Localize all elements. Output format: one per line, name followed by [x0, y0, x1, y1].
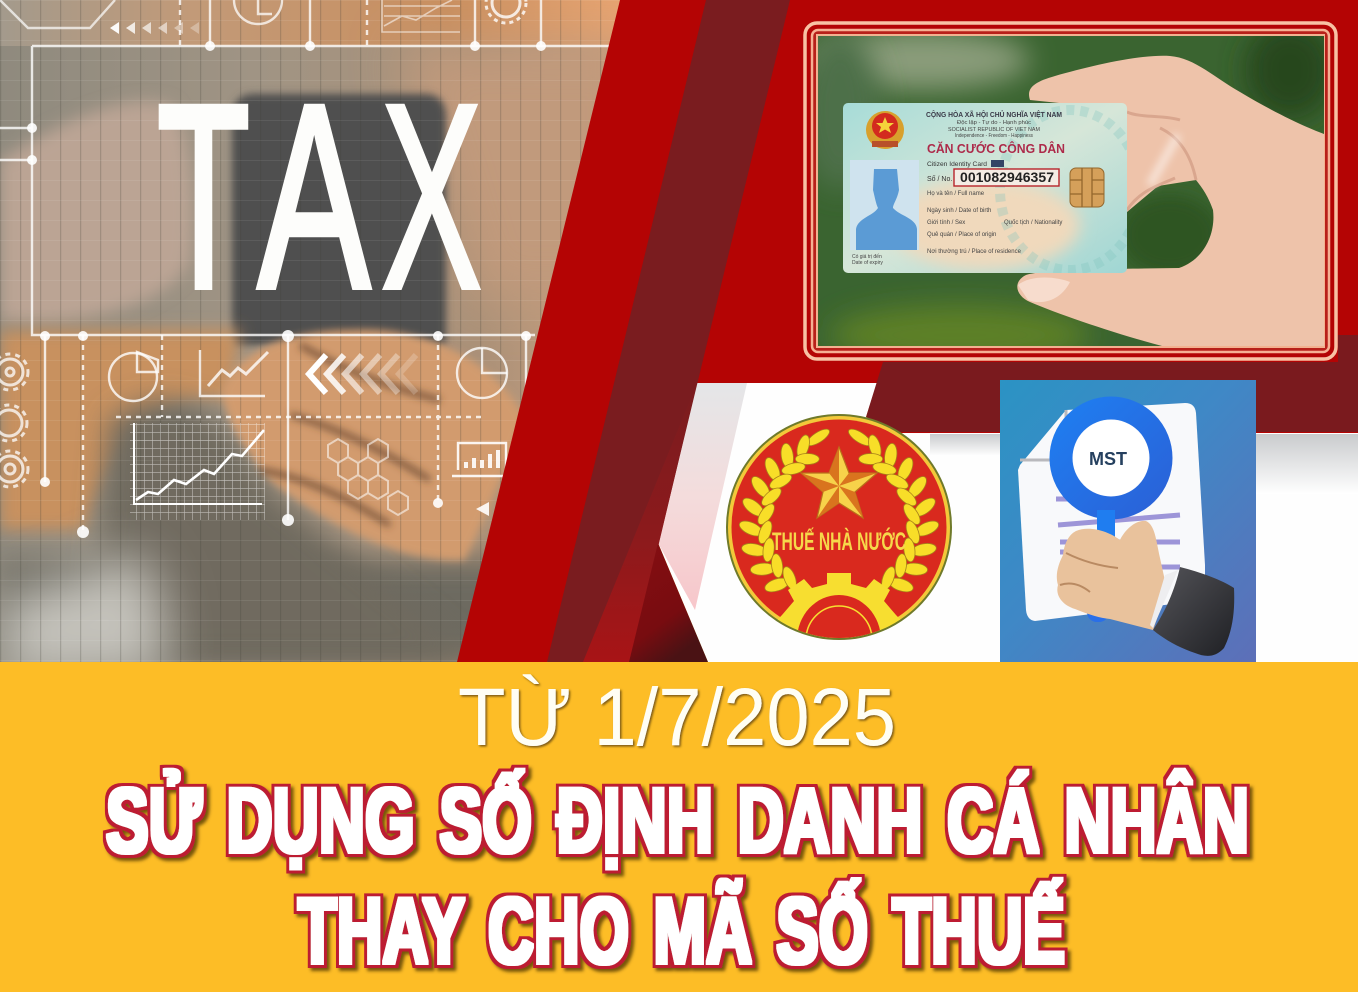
icon: hexagon top left: [0, 0, 115, 28]
panel: tax photo background: [0, 0, 640, 680]
icon: white sleeve: [0, 550, 167, 680]
icon: citizen ID card: [843, 103, 1140, 273]
icon: fist holding handle: [1057, 521, 1167, 630]
icon: finger creases: [260, 345, 440, 525]
icon: laptop bar chart: [452, 443, 510, 476]
card fields: Quốc tịch / Nationality: [1004, 220, 1062, 226]
card fields: Nơi thường trú / Place of residence: [927, 249, 1022, 255]
icon: blurred left hand: [0, 102, 192, 322]
card fields: Họ và tên / Full name: [927, 191, 985, 197]
heading: TAX: T: [157, 50, 250, 343]
dark banner right: [866, 335, 1358, 432]
icon: small triangle: [476, 502, 489, 516]
icon: top pie chart: [234, 0, 282, 24]
icon: pie chart right: [457, 348, 507, 398]
card number: Số / No.: [927, 174, 952, 183]
icon: line chart box: [200, 350, 268, 396]
icon: citizen ID card: Citizen Identity Card: [927, 161, 987, 168]
card header text: [926, 110, 1062, 139]
photo background: [818, 36, 1324, 346]
diagram: interface frame lines: [0, 0, 615, 532]
card fields: [927, 191, 1062, 255]
card header text: Independence - Freedom - Happiness: [955, 133, 1033, 139]
card chip: [1070, 168, 1104, 207]
heading: date: TỪ 1/7/2025: [458, 672, 896, 763]
icon: right hand: [222, 330, 525, 560]
emblem star: [801, 447, 877, 518]
icon: citizen ID card: Date of expiry: [852, 260, 883, 266]
icon: finger shading: [1127, 112, 1196, 210]
dark slanted band: [547, 0, 790, 662]
white lower panel: [658, 383, 1358, 662]
heading: TAX: A: [258, 50, 371, 343]
icon: top gear: [486, 0, 526, 23]
card header text: SOCIALIST REPUBLIC OF VIET NAM: [948, 127, 1040, 133]
icon: left forearm: [0, 330, 240, 530]
icon: chevrons arrow: [309, 355, 416, 393]
icon: pie chart lower left: [109, 352, 158, 401]
card header text: Độc lập - Tự do - Hạnh phúc: [957, 120, 1031, 126]
icon: top chevrons: [110, 22, 199, 34]
icon: hexagons: [328, 439, 408, 515]
panel: red slanted bands: [457, 0, 1358, 662]
emblem gear: [778, 573, 900, 638]
icon: suit sleeve: [1150, 567, 1234, 656]
icon: smartphone silhouette: [232, 94, 446, 345]
icon: dark lower body: [90, 400, 480, 662]
icon: hand holding card: [1017, 56, 1324, 346]
logo: state tax emblem: [726, 414, 952, 640]
dark wedge: [629, 543, 708, 662]
icon: citizen ID card: CĂN CƯỚC CÔNG DÂN: [927, 141, 1065, 156]
panel: photo frame of citizen ID card: [800, 20, 1336, 365]
panel: MST lookup illustration: [1000, 380, 1256, 662]
icon: document: [1018, 403, 1205, 621]
icon: citizen ID card: Có giá trị đến: [852, 254, 882, 260]
label: MST: MST: [1089, 449, 1127, 469]
chart: small grid chart: [130, 423, 265, 520]
card portrait: [850, 160, 919, 250]
icon: citizen ID card: 001082946357: [960, 169, 1054, 185]
card fields: Quê quán / Place of origin: [927, 232, 996, 238]
card fields: Ngày sinh / Date of birth: [927, 208, 991, 214]
emblem text: THUẾ NHÀ NƯỚC: [772, 526, 906, 556]
icon: magnifying glass: [1061, 408, 1161, 622]
heading: TAX: [158, 104, 482, 290]
icon: connector nodes: [27, 41, 546, 538]
card fields: Giới tính / Sex: [927, 220, 965, 226]
card crest: [866, 111, 904, 149]
card header text: CỘNG HÒA XÃ HỘI CHỦ NGHĨA VIỆT NAM: [926, 110, 1062, 119]
icon: top line chart: [382, 0, 460, 32]
emblem laurel: [737, 426, 832, 595]
icon: thumb nail: [1018, 277, 1070, 302]
icon: gears left: [0, 354, 28, 487]
panel: yellow title banner: [0, 662, 1358, 992]
heading: TAX: X: [382, 50, 481, 343]
